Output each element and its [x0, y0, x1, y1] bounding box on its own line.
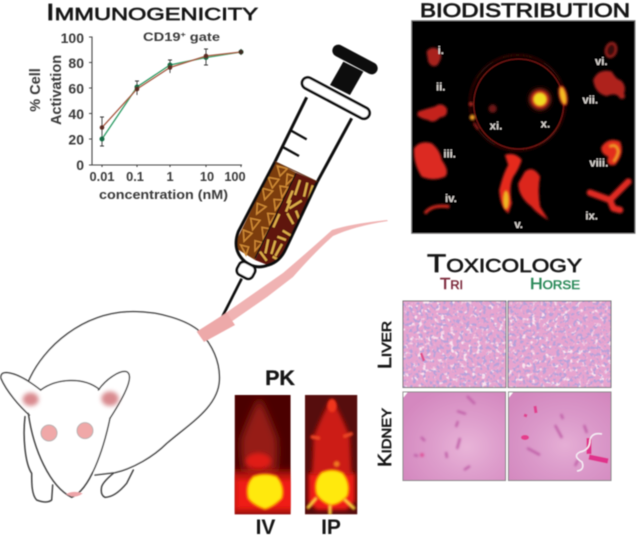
nose — [66, 492, 83, 497]
organ labels — [436, 45, 608, 231]
title: toxicology: TOXICOLOGY — [427, 250, 582, 278]
yellow limbs — [307, 498, 355, 515]
organ labels: vi. — [595, 56, 608, 68]
needle — [221, 279, 242, 320]
x axis tick labels: 100 — [224, 169, 246, 184]
divider between nanostructures — [255, 173, 296, 258]
organ: ix — [590, 182, 628, 210]
organ: v right — [518, 169, 548, 220]
barrel fill: nanostructures — [233, 162, 317, 270]
y axis title: % Cell — [28, 68, 44, 112]
graduation marks — [283, 130, 307, 156]
right section — [255, 173, 317, 270]
row label: kidney: KIDNEY — [375, 408, 395, 467]
y axis tick labels — [61, 30, 84, 173]
error bars — [100, 49, 241, 146]
inner ear glow left — [23, 393, 39, 406]
organ: iii — [414, 142, 447, 179]
bright core — [247, 474, 283, 509]
chart axes — [89, 37, 242, 167]
x axis tick labels: 10 — [200, 169, 214, 184]
organ: ii — [417, 105, 447, 121]
panel: biodistribution image — [412, 21, 635, 233]
plunger — [330, 51, 372, 95]
column label: tri: TRI — [440, 276, 463, 293]
organ: vii — [593, 71, 625, 99]
y axis tick labels: 40 — [68, 106, 84, 122]
lower wide glow — [227, 472, 298, 515]
head — [28, 381, 110, 497]
y axis tick labels: 60 — [68, 80, 84, 96]
snout glow — [327, 399, 337, 412]
series: tri (brown) — [100, 50, 243, 130]
organ labels: iv. — [445, 193, 457, 205]
chart subtitle: CD19 — [143, 32, 172, 44]
illustration: mouse — [1, 312, 235, 502]
icon: syringe — [221, 51, 372, 320]
histology: liver horse — [508, 301, 611, 388]
label: IP: IP — [321, 516, 341, 539]
label: IV: IV — [256, 516, 275, 539]
fluid level line — [275, 162, 317, 182]
column label: horse: HORSE — [530, 276, 580, 293]
organ labels: iii. — [443, 148, 456, 160]
right eye — [77, 423, 93, 439]
ring hot spots — [469, 86, 568, 129]
x axis tick labels: 0.01 — [90, 169, 114, 184]
x axis title: concentration (nM) — [99, 187, 228, 202]
needle hub — [235, 260, 257, 281]
y axis tick labels: 80 — [68, 55, 84, 71]
organ labels: v. — [514, 219, 523, 231]
left section — [233, 162, 296, 260]
legs — [24, 417, 133, 502]
black imaging background — [412, 21, 635, 233]
bright core — [316, 470, 348, 505]
skin strip — [200, 220, 388, 340]
dark background — [235, 395, 291, 514]
x axis tick labels: 1 — [166, 169, 174, 184]
title: biodistribution: BIODISTRIBUTION — [420, 1, 630, 22]
line chart: immunogenicity — [28, 30, 246, 202]
paws — [311, 433, 353, 438]
dark background — [305, 395, 357, 514]
organ labels: x. — [541, 119, 550, 131]
flange — [300, 75, 372, 121]
y axis tick labels: 100 — [61, 30, 84, 46]
panel: PK images — [227, 395, 357, 515]
organ: vi — [604, 42, 618, 58]
body — [312, 398, 352, 475]
lower glow — [308, 473, 355, 510]
y axis tick labels: 20 — [68, 132, 84, 148]
left eye — [41, 425, 57, 441]
faint body — [241, 398, 277, 475]
organ: iv — [425, 206, 449, 213]
y axis tick labels: 0 — [76, 157, 84, 173]
x axis tick labels — [90, 169, 246, 184]
organ labels: vii. — [582, 95, 598, 107]
barrel outline — [236, 97, 352, 267]
series: horse (green) — [100, 50, 244, 142]
x axis tick labels: 0.1 — [126, 169, 144, 184]
organ labels: viii. — [589, 158, 608, 170]
organ: i — [427, 48, 441, 66]
organ labels: ii. — [436, 82, 445, 94]
y axis title — [28, 55, 65, 125]
y axis title: Activation — [49, 55, 65, 125]
histology: kidney horse — [508, 392, 611, 480]
organ labels: i. — [438, 45, 444, 57]
histology: kidney tri — [403, 392, 506, 480]
organ: xi — [489, 105, 497, 113]
organ labels: ix. — [585, 211, 598, 223]
right ear — [98, 371, 129, 418]
organ: v left — [499, 154, 522, 213]
dish ring — [470, 55, 565, 150]
organ labels: xi. — [490, 120, 502, 132]
lower bright glow — [237, 480, 293, 508]
body — [28, 312, 219, 475]
organ: x — [530, 89, 550, 109]
PK image: IV — [234, 394, 292, 516]
title: PK: PK — [265, 366, 295, 390]
row label: liver: LIVER — [375, 321, 395, 369]
chart subtitle: + — [181, 32, 186, 39]
injection site — [197, 313, 235, 342]
left ear — [1, 373, 41, 415]
chart subtitle: gate — [186, 32, 220, 44]
PK image: IP — [305, 395, 357, 515]
histology: liver tri — [403, 301, 506, 388]
organ: viii — [601, 140, 622, 165]
inner ear glow right — [101, 391, 119, 406]
liver glow — [246, 453, 271, 469]
upper nub — [334, 461, 340, 467]
